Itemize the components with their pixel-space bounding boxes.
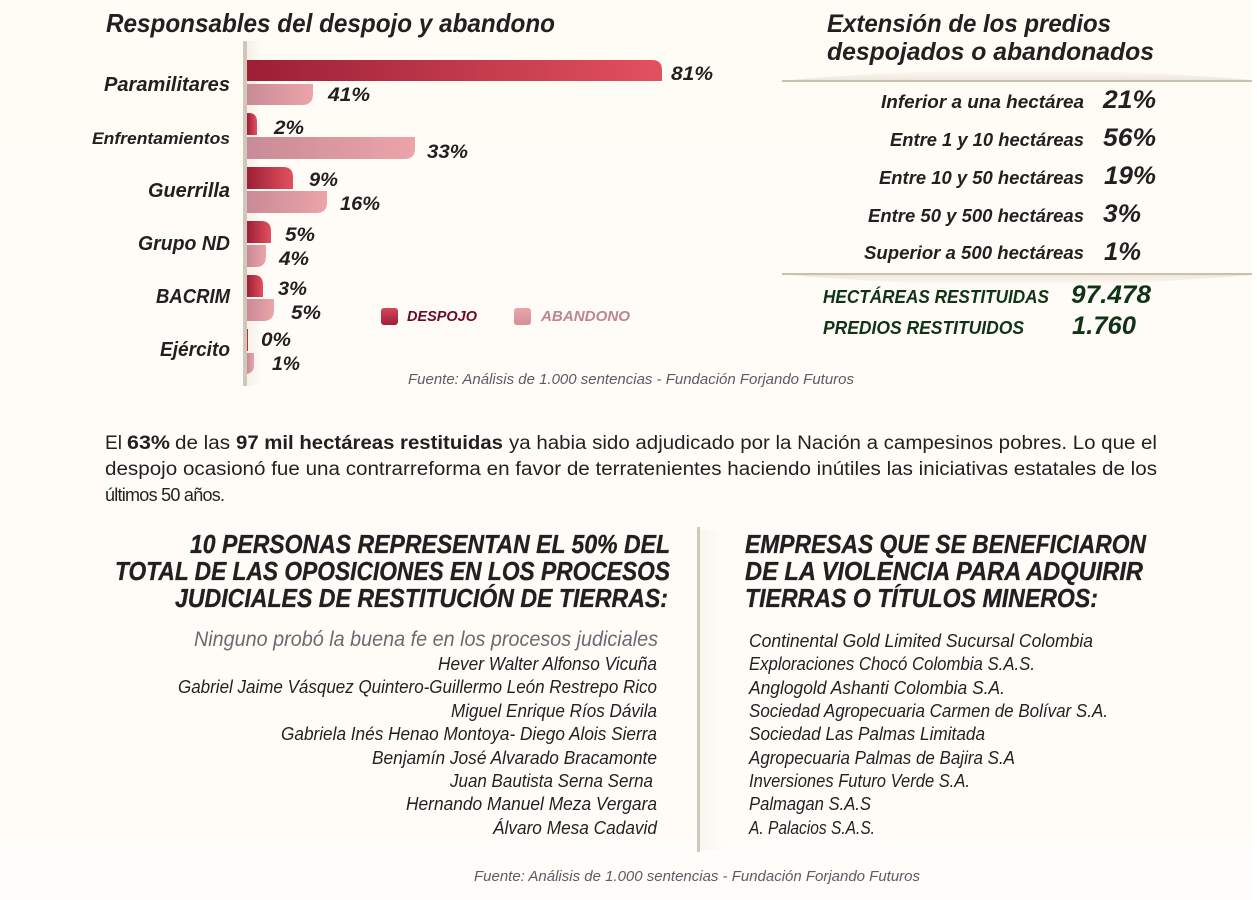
list: names: Benjamín José Alvarado Bracamonte bbox=[372, 748, 657, 768]
text block: intro paragraph: de las bbox=[175, 433, 230, 454]
list: companies: Palmagan S.A.S bbox=[749, 794, 871, 814]
panel heading: Extensión de los predios bbox=[827, 10, 1111, 38]
list: names: Gabriel Jaime Vásquez Quintero-Guillermo León Restrepo Rico bbox=[178, 677, 657, 697]
row: Enfrentamientos: 2% bbox=[273, 118, 304, 139]
heading: 10 personas: 10 PERSONAS REPRESENTAN EL 50% DEL bbox=[190, 529, 670, 559]
panel: oposiciones bbox=[115, 529, 671, 838]
heading: empresas: DE LA VIOLENCIA PARA ADQUIRIR bbox=[745, 556, 1143, 586]
legend: DESPOJO bbox=[407, 308, 477, 325]
row: Enfrentamientos: Enfrentamientos bbox=[92, 129, 230, 148]
row: Ejército: 0% bbox=[261, 330, 291, 351]
table: size ranges: 1% bbox=[1104, 238, 1141, 266]
legend: ABANDONO bbox=[540, 308, 630, 325]
legend bbox=[381, 308, 630, 325]
list: companies: Anglogold Ashanti Colombia S.A. bbox=[748, 678, 1005, 698]
list: names bbox=[178, 654, 658, 838]
panel heading: despojados o abandonados bbox=[827, 38, 1154, 66]
row: Ejército: Ejército bbox=[160, 339, 230, 361]
heading: 10 personas: JUDICIALES DE RESTITUCIÓN DE TIERRAS: bbox=[175, 583, 668, 613]
table: size ranges: Inferior a una hectárea bbox=[881, 91, 1084, 112]
list: names: Álvaro Mesa Cadavid bbox=[492, 818, 658, 838]
list: companies: Exploraciones Chocó Colombia S.A.S. bbox=[749, 654, 1035, 674]
list: names: Juan Bautista Serna Serna bbox=[449, 771, 653, 791]
panel: empresas bbox=[745, 529, 1147, 838]
text block: intro paragraph: despojo ocasionó fue una contrarreforma en favor de terratenientes haciendo inútiles las iniciativas estatales de los bbox=[105, 459, 1157, 480]
row: Grupo ND: 5% bbox=[285, 225, 315, 246]
totals restituidos: PREDIOS RESTITUIDOS bbox=[823, 317, 1025, 338]
list: names: Gabriela Inés Henao Montoya- Diego Alois Sierra bbox=[281, 724, 657, 744]
heading: 10 personas: TOTAL DE LAS OPOSICIONES EN LOS PROCESOS bbox=[115, 556, 671, 586]
table: size ranges: 21% bbox=[1102, 86, 1156, 114]
source note bottom: Fuente: Análisis de 1.000 sentencias - Fundación Forjando Futuros bbox=[474, 868, 920, 885]
list: names: Miguel Enrique Ríos Dávila bbox=[451, 701, 657, 721]
text block: intro paragraph: últimos 50 años. bbox=[105, 485, 225, 505]
source note: Fuente: Análisis de 1.000 sentencias - Fundación Forjando Futuros bbox=[408, 371, 854, 388]
row: BACRIM: BACRIM bbox=[156, 286, 231, 308]
row: Guerrilla: Guerrilla bbox=[148, 180, 230, 202]
table: size ranges: Entre 50 y 500 hectáreas bbox=[868, 205, 1084, 226]
list: companies: Agropecuaria Palmas de Bajira S.A bbox=[748, 748, 1015, 768]
panel: responsables del despojo y abandono bbox=[92, 8, 854, 388]
bar chart bbox=[92, 41, 713, 386]
text block: intro paragraph: ya habia sido adjudicado por la Nación a campesinos pobres. Lo que el bbox=[509, 433, 1157, 454]
list: names: Hever Walter Alfonso Vicuña bbox=[438, 654, 657, 674]
heading: empresas bbox=[745, 529, 1147, 613]
text block: intro paragraph: 63% bbox=[127, 433, 170, 454]
row: Grupo ND: 4% bbox=[278, 249, 309, 270]
totals restituidos: 1.760 bbox=[1072, 312, 1136, 340]
list: companies: Sociedad Las Palmas Limitada bbox=[749, 724, 985, 744]
row: Enfrentamientos: 33% bbox=[427, 142, 468, 163]
text block: intro paragraph: El bbox=[105, 433, 122, 454]
row: Paramilitares: 81% bbox=[671, 64, 713, 85]
table: size ranges bbox=[864, 86, 1156, 266]
row: Paramilitares bbox=[104, 60, 713, 106]
totals restituidos: HECTÁREAS RESTITUIDAS bbox=[823, 286, 1050, 307]
panel heading bbox=[827, 10, 1154, 66]
row: Grupo ND: Grupo ND bbox=[138, 233, 230, 255]
table: size ranges: Entre 1 y 10 hectáreas bbox=[890, 129, 1084, 150]
row: BACRIM: 5% bbox=[291, 303, 321, 324]
totals restituidos bbox=[823, 281, 1151, 340]
list: companies: Inversiones Futuro Verde S.A. bbox=[749, 771, 970, 791]
list: names: Hernando Manuel Meza Vergara bbox=[406, 794, 657, 814]
row: Ejército bbox=[160, 329, 300, 375]
heading: 10 personas bbox=[115, 529, 671, 613]
subheading: Ninguno probó la buena fe en los procesos judiciales bbox=[194, 628, 658, 651]
row: Ejército: 1% bbox=[272, 354, 300, 375]
row: Guerrilla: 16% bbox=[340, 194, 380, 215]
list: companies bbox=[748, 631, 1108, 838]
totals restituidos: 97.478 bbox=[1071, 281, 1151, 309]
row: BACRIM: 3% bbox=[278, 279, 307, 300]
list: companies: Continental Gold Limited Sucursal Colombia bbox=[749, 631, 1093, 651]
row: Guerrilla bbox=[148, 167, 380, 215]
table: size ranges: Entre 10 y 50 hectáreas bbox=[879, 167, 1084, 188]
list: companies: A. Palacios S.A.S. bbox=[748, 818, 875, 838]
chart title: Responsables del despojo y abandono bbox=[106, 8, 555, 38]
text block: intro paragraph bbox=[105, 433, 1157, 505]
row: Enfrentamientos bbox=[92, 113, 468, 163]
heading: empresas: TIERRAS O TÍTULOS MINEROS: bbox=[745, 583, 1098, 613]
table: size ranges: 3% bbox=[1103, 200, 1141, 228]
row: Paramilitares: Paramilitares bbox=[104, 74, 230, 96]
heading: empresas: EMPRESAS QUE SE BENEFICIARON bbox=[745, 529, 1147, 559]
row: Guerrilla: 9% bbox=[309, 170, 338, 191]
panel: extensión de los predios bbox=[782, 10, 1252, 340]
list: companies: Sociedad Agropecuaria Carmen de Bolívar S.A. bbox=[749, 701, 1108, 721]
row: BACRIM bbox=[156, 275, 321, 324]
text block: intro paragraph: 97 mil hectáreas restituidas bbox=[236, 433, 503, 454]
table: size ranges: 56% bbox=[1103, 124, 1156, 152]
row: Paramilitares: 41% bbox=[327, 85, 370, 106]
table: size ranges: Superior a 500 hectáreas bbox=[864, 242, 1084, 263]
row: Grupo ND bbox=[138, 221, 315, 270]
table: size ranges: 19% bbox=[1104, 162, 1156, 190]
